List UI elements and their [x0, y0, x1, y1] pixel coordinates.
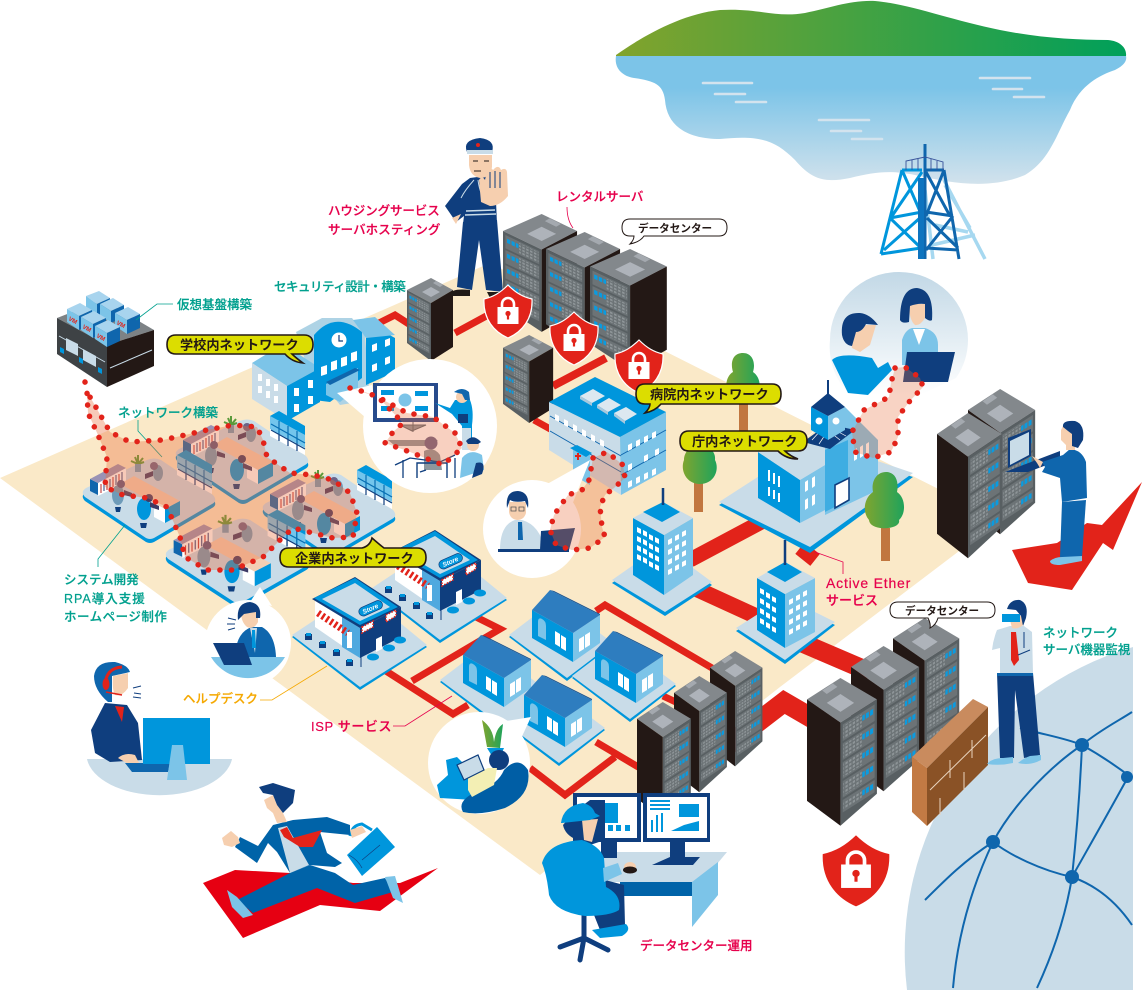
woman [900, 288, 938, 365]
VM cubes: VM [67, 316, 78, 326]
lake and hill [616, 1, 1126, 184]
active ether label: Active Ether [826, 575, 911, 591]
shield 3 [615, 340, 663, 393]
rental server label [556, 190, 644, 228]
office 3 [263, 465, 395, 558]
server rack: centre [503, 335, 553, 423]
house D [501, 675, 605, 766]
house B [572, 631, 676, 722]
projection screen [373, 383, 438, 422]
helpdesk leader [183, 666, 327, 706]
shield 2 [550, 312, 598, 365]
large shield [822, 834, 890, 907]
globe [905, 647, 1133, 990]
chair [560, 915, 608, 960]
roof units [580, 389, 637, 424]
houses [440, 590, 676, 766]
housing label [328, 203, 441, 237]
hill [616, 1, 1126, 56]
data center bubble lower: データセンター [905, 604, 979, 618]
technician [1005, 421, 1087, 565]
operator workstation [542, 793, 727, 960]
security design label: セキュリティ設計・構築 [274, 279, 406, 294]
system dev label [64, 525, 167, 624]
house A [509, 590, 613, 681]
firewall [912, 699, 988, 826]
running businessman [222, 783, 403, 918]
helpdesk leader: ヘルプデスク [183, 691, 258, 706]
school network bubble [167, 335, 313, 363]
network construction label [118, 405, 219, 457]
hospital [549, 377, 666, 495]
helpdesk operator [87, 662, 232, 795]
housing label: ハウジングサービス [328, 203, 440, 218]
data center bubble top [622, 219, 727, 244]
housing label: サーバホスティング [328, 222, 441, 237]
call staff vignette [205, 587, 291, 686]
tablet user vignette [428, 712, 531, 814]
server racks lower right [807, 618, 959, 826]
enterprise network bubble [280, 538, 426, 567]
active ether label: サービス [826, 593, 878, 608]
student right [460, 437, 484, 478]
trees [683, 353, 760, 512]
teacher [435, 389, 473, 450]
classroom vignette [337, 359, 497, 493]
VM cubes: VM [115, 320, 126, 330]
VM label: 仮想基盤構築 [177, 297, 253, 312]
skyscraper left [612, 488, 712, 616]
system dev label: システム開発 [64, 573, 139, 587]
desk [600, 852, 727, 927]
network monitoring label: ネットワーク [1043, 626, 1118, 640]
tree centre [726, 353, 760, 432]
school [252, 317, 395, 421]
government platform and building [719, 380, 913, 553]
right monitor [643, 793, 710, 865]
guard figure [445, 138, 512, 298]
binocular man [987, 600, 1041, 765]
doctor vignette [483, 460, 590, 578]
office 4 [166, 510, 309, 607]
data center bubble top: データセンター [638, 222, 712, 235]
enterprise network bubble: 企業内ネットワーク [295, 550, 414, 566]
laptop [903, 352, 955, 382]
classroom dotted link [350, 388, 462, 465]
background ground plane [0, 263, 1000, 875]
data center racks centre [637, 651, 762, 818]
tree left [683, 446, 717, 512]
lightning arrow right [1012, 482, 1142, 590]
skyscraper right [736, 540, 835, 664]
red network cables [375, 314, 870, 795]
shield 1 [484, 285, 532, 338]
hospital network bubble [636, 384, 781, 413]
system dev label: RPA導入支援 [64, 591, 146, 606]
hospital dotted link [550, 452, 625, 550]
office 1 [83, 450, 215, 543]
stores [292, 530, 507, 690]
VM cubes: VM [95, 333, 106, 343]
rental server label: レンタルサーバ [556, 190, 644, 204]
school network bubble: 学校内ネットワーク [180, 336, 299, 352]
bag [347, 824, 395, 876]
dotted office network area [85, 382, 357, 570]
data center operations label: データセンター運用 [640, 938, 753, 953]
store front [292, 577, 427, 690]
government dotted link [852, 367, 923, 458]
network monitoring label: サーバ機器監視 [1043, 642, 1131, 657]
lightning arrow left [203, 868, 438, 938]
active ether label [815, 552, 911, 608]
office islands [83, 411, 395, 607]
meeting vignette [830, 272, 968, 395]
house C [440, 635, 544, 726]
security shields [484, 285, 663, 393]
server racks with technician [937, 389, 1035, 558]
VM cubes [67, 291, 140, 347]
network monitoring label [1043, 626, 1131, 657]
data center bubble lower [890, 602, 995, 628]
government network bubble [680, 431, 807, 459]
VM label [136, 297, 253, 320]
system dev label: ホームページ制作 [64, 610, 167, 624]
seated student [417, 436, 447, 478]
lake water [616, 56, 1126, 184]
left monitor [573, 793, 641, 858]
server racks: rental servers [503, 214, 667, 370]
server rack: security [407, 278, 453, 361]
store back [372, 530, 507, 643]
ISP leader [311, 696, 452, 734]
meeting table [388, 440, 438, 446]
government network bubble: 庁内ネットワーク [692, 433, 798, 449]
water ripples [703, 78, 1044, 139]
ISP leader: ISP サービス [311, 719, 392, 734]
VM cubes: VM [81, 324, 92, 334]
man [832, 313, 892, 395]
office 2 [176, 411, 308, 504]
VM server [57, 291, 154, 387]
tree right [865, 472, 904, 561]
network construction label: ネットワーク構築 [118, 405, 219, 420]
operator person [590, 880, 625, 930]
radio tower [881, 144, 985, 259]
hospital network bubble: 病院内ネットワーク [650, 386, 769, 402]
